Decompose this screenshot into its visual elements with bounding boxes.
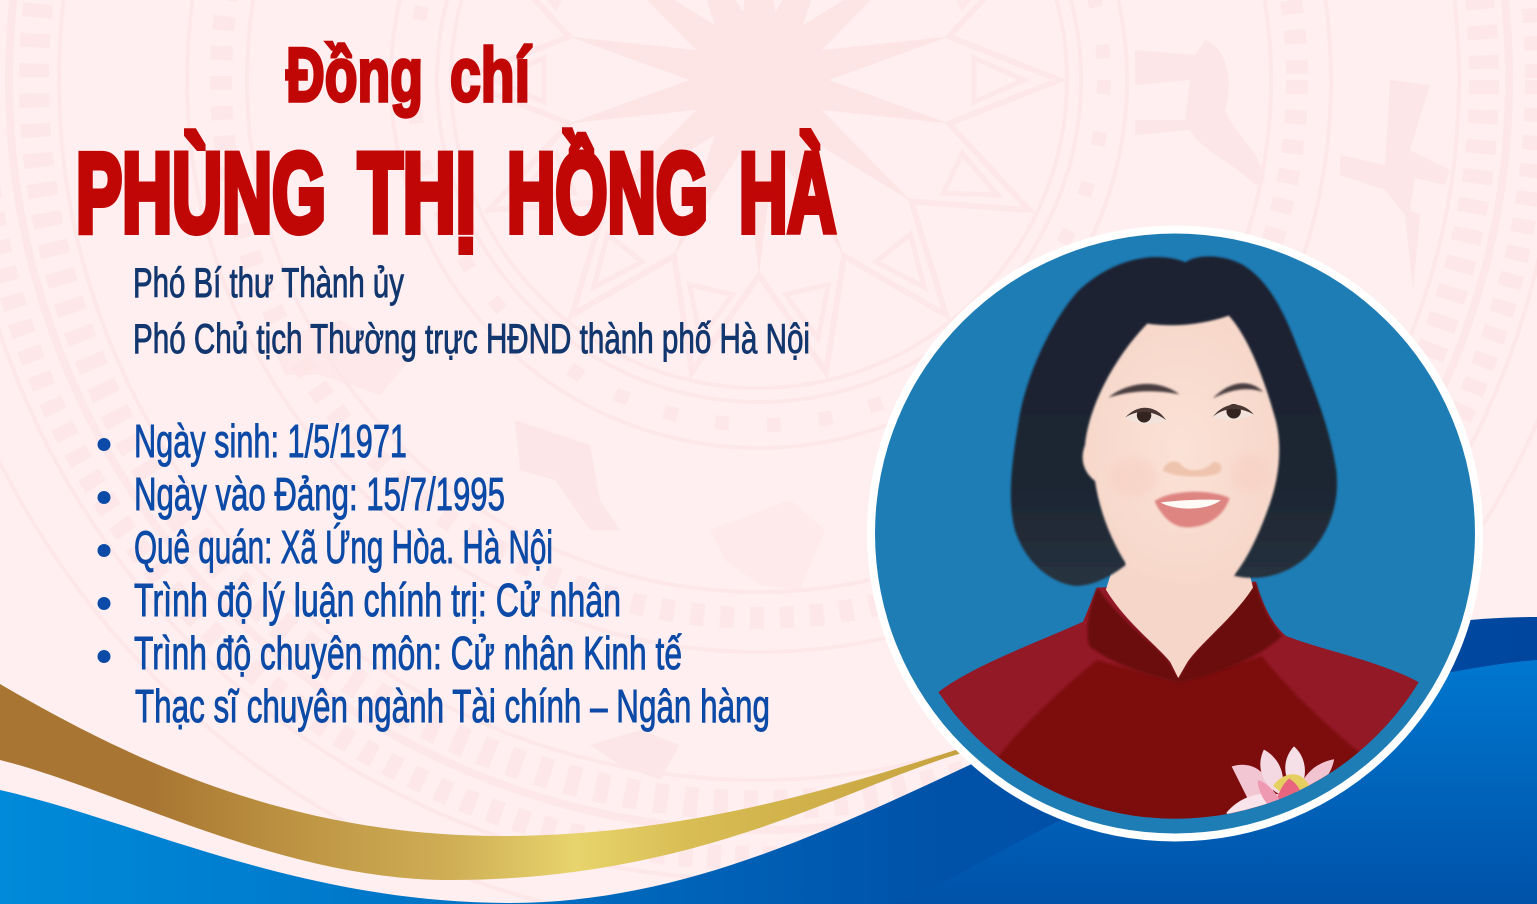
eyes	[1125, 406, 1254, 424]
biography list	[98, 415, 770, 732]
gold ribbon	[0, 684, 962, 880]
neck	[1106, 541, 1253, 678]
blue disc	[875, 234, 1475, 834]
portrait circle	[867, 226, 1483, 863]
hair	[1011, 256, 1337, 586]
birth date: Ngày sinh: 1/5/1971	[134, 415, 407, 467]
heading: name	[76, 130, 836, 256]
dress	[938, 581, 1418, 819]
bullet: hometown	[98, 544, 110, 557]
master degree: Thạc sĩ chuyên ngành Tài chính – Ngân hàng	[135, 680, 770, 732]
bottom blue wave	[0, 617, 1537, 904]
political theory level: Trình độ lý luận chính trị: Cử nhân	[134, 574, 621, 626]
white ring	[867, 226, 1483, 842]
professional qualification: Trình độ chuyên môn: Cử nhân Kinh tế	[134, 627, 682, 679]
hometown: Quê quán: Xã Ứng Hòa. Hà Nội	[134, 521, 553, 573]
word: Đồng: Đồng	[286, 33, 423, 118]
nose	[1163, 461, 1222, 477]
position line 2: Phó Chủ tịch Thường trực HĐND thành phố Hà Nội	[133, 315, 810, 362]
portrait	[938, 256, 1419, 863]
word: HÀ: HÀ	[739, 130, 836, 256]
bullet: party date	[98, 491, 110, 504]
cheeks	[1109, 457, 1157, 497]
word: chí: chí	[450, 33, 532, 118]
party join date: Ngày vào Đảng: 15/7/1995	[134, 468, 505, 520]
word: THỊ: THỊ	[358, 130, 476, 256]
heading: Đồng chí	[286, 33, 532, 118]
bullet: qualification	[98, 650, 110, 663]
mouth	[1155, 492, 1230, 527]
position line 1: Phó Bí thư Thành ủy	[133, 259, 404, 306]
bullet: birth date	[98, 438, 110, 451]
lotus	[1226, 746, 1334, 814]
word: HỒNG: HỒNG	[507, 130, 708, 256]
word: PHÙNG: PHÙNG	[76, 130, 326, 256]
eyebrows	[1108, 383, 1263, 398]
face	[1083, 316, 1279, 584]
bullet: political level	[98, 597, 110, 610]
lighter blue wave	[893, 660, 1537, 904]
